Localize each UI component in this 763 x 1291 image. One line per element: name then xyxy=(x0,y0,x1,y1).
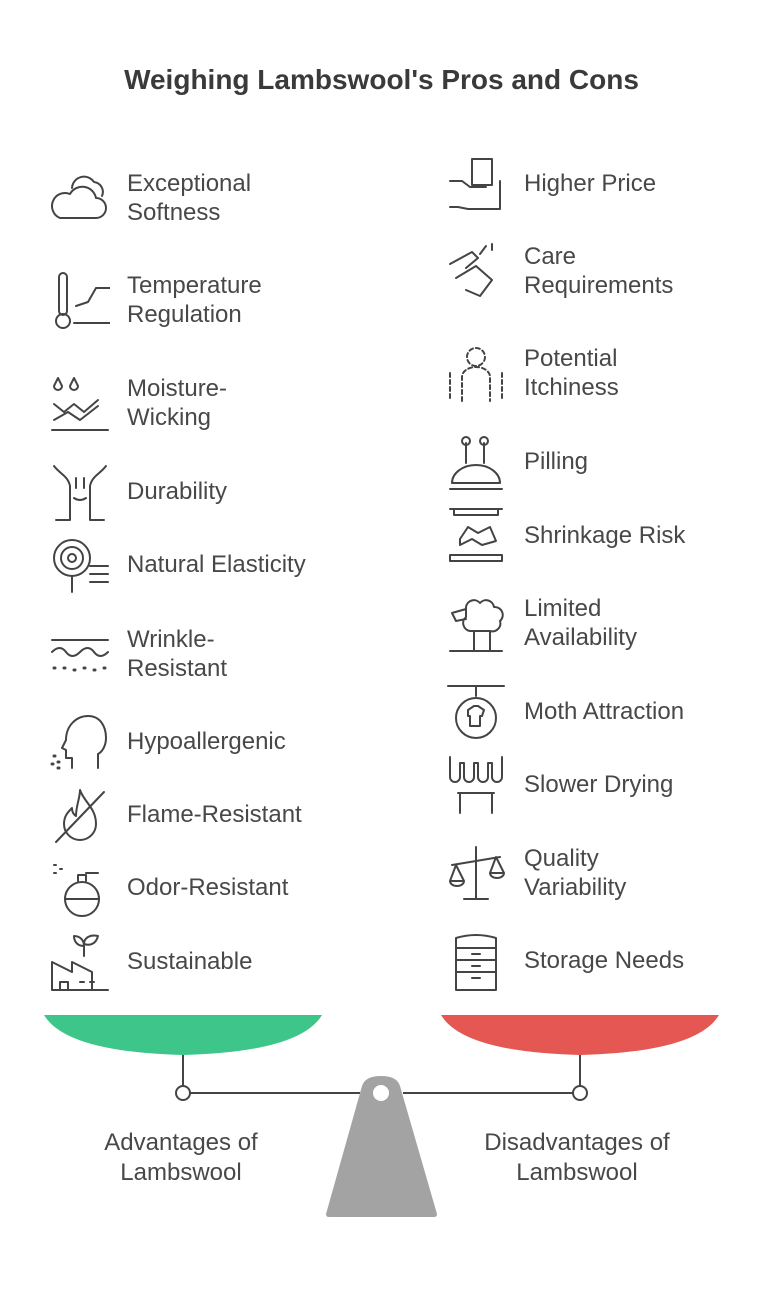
text: Limited Availability xyxy=(524,595,637,651)
text: Temperature Regulation: Temperature xyxy=(127,272,262,299)
text: Storage Needs: Storage Needs xyxy=(524,947,684,974)
text: Care Requirements xyxy=(524,243,673,299)
text: Pilling: Pilling xyxy=(524,448,588,475)
text: Durability: Durability xyxy=(127,478,227,505)
text: Natural Elasticity: Natural Elasticity xyxy=(127,551,306,578)
text: Care Requirements: Requirements xyxy=(524,272,673,299)
text: Slower Drying: Slower Drying xyxy=(524,771,673,798)
fulcrum xyxy=(326,1076,437,1217)
text: Potential Itchiness: Itchiness xyxy=(524,374,619,401)
text: Flame-Resistant: Flame-Resistant xyxy=(127,801,302,828)
text: Temperature Regulation xyxy=(127,272,262,328)
text: Hypoallergenic: Hypoallergenic xyxy=(127,728,286,755)
red pan xyxy=(441,1015,719,1055)
text: Moth Attraction: Moth Attraction xyxy=(524,698,684,725)
label: disadvantages xyxy=(484,1129,670,1186)
icon: drawers xyxy=(455,934,497,991)
text: Temperature Regulation: Regulation xyxy=(127,301,242,328)
icon: balance xyxy=(449,846,505,900)
text: Moisture-Wicking xyxy=(127,375,227,431)
label: advantages: Lambswool xyxy=(120,1159,242,1186)
text: Wrinkle-Resistant: Resistant xyxy=(127,655,227,682)
icon: drops xyxy=(51,377,109,431)
text: Care Requirements: Care xyxy=(524,243,576,270)
title: Weighing Lambswool's Pros and Cons xyxy=(124,64,639,95)
icon: price hand xyxy=(449,158,501,210)
label: disadvantages: Disadvantages of xyxy=(484,1129,670,1156)
text: Quality Variability: Quality xyxy=(524,845,599,872)
icon: cloud xyxy=(51,176,107,219)
label: disadvantages: Lambswool xyxy=(516,1159,638,1186)
text: Wrinkle-Resistant: Wrinkle- xyxy=(127,626,215,653)
text: Sustainable: Sustainable xyxy=(127,948,252,975)
text: Potential Itchiness: Potential xyxy=(524,345,617,372)
text: Shrinkage Risk: Shrinkage Risk xyxy=(524,522,685,549)
label: advantages xyxy=(104,1129,258,1186)
icon: person dashed xyxy=(449,347,503,402)
icon: fingerprint xyxy=(53,539,109,593)
icon: sheep xyxy=(449,599,504,652)
icon: dripping xyxy=(449,756,503,814)
icon: factory plant xyxy=(51,934,109,991)
text: Higher Price: Higher Price xyxy=(524,170,656,197)
text: Quality Variability: Variability xyxy=(524,874,626,901)
icon: head xyxy=(50,715,107,770)
text: Exceptional Softness: Softness xyxy=(127,199,220,226)
text: Exceptional Softness xyxy=(127,170,251,226)
text: Limited Availability: Availability xyxy=(524,624,637,651)
text: Moisture-Wicking: Moisture- xyxy=(127,375,227,402)
icon: flame crossed xyxy=(55,789,105,843)
text: Odor-Resistant: Odor-Resistant xyxy=(127,874,288,901)
text: Exceptional Softness: Exceptional xyxy=(127,170,251,197)
icon: tree xyxy=(53,465,107,521)
text: Potential Itchiness xyxy=(524,345,619,401)
text: Wrinkle-Resistant xyxy=(127,626,227,682)
icon: washing hands xyxy=(449,243,493,297)
panel: advantages list xyxy=(50,170,306,991)
text: Quality Variability xyxy=(524,845,626,901)
green pan xyxy=(44,1015,322,1055)
text: Moisture-Wicking: Wicking xyxy=(127,404,211,431)
icon: moth shirt xyxy=(447,685,505,739)
icon: pincushion xyxy=(449,436,503,490)
icon: thermometer xyxy=(55,272,110,329)
label: advantages: Advantages of xyxy=(104,1129,258,1156)
icon: shrink xyxy=(449,508,503,562)
icon: perfume xyxy=(53,864,100,917)
panel: disadvantages list xyxy=(447,158,686,991)
text: Limited Availability: Limited xyxy=(524,595,601,622)
icon: wrinkle xyxy=(51,639,109,672)
